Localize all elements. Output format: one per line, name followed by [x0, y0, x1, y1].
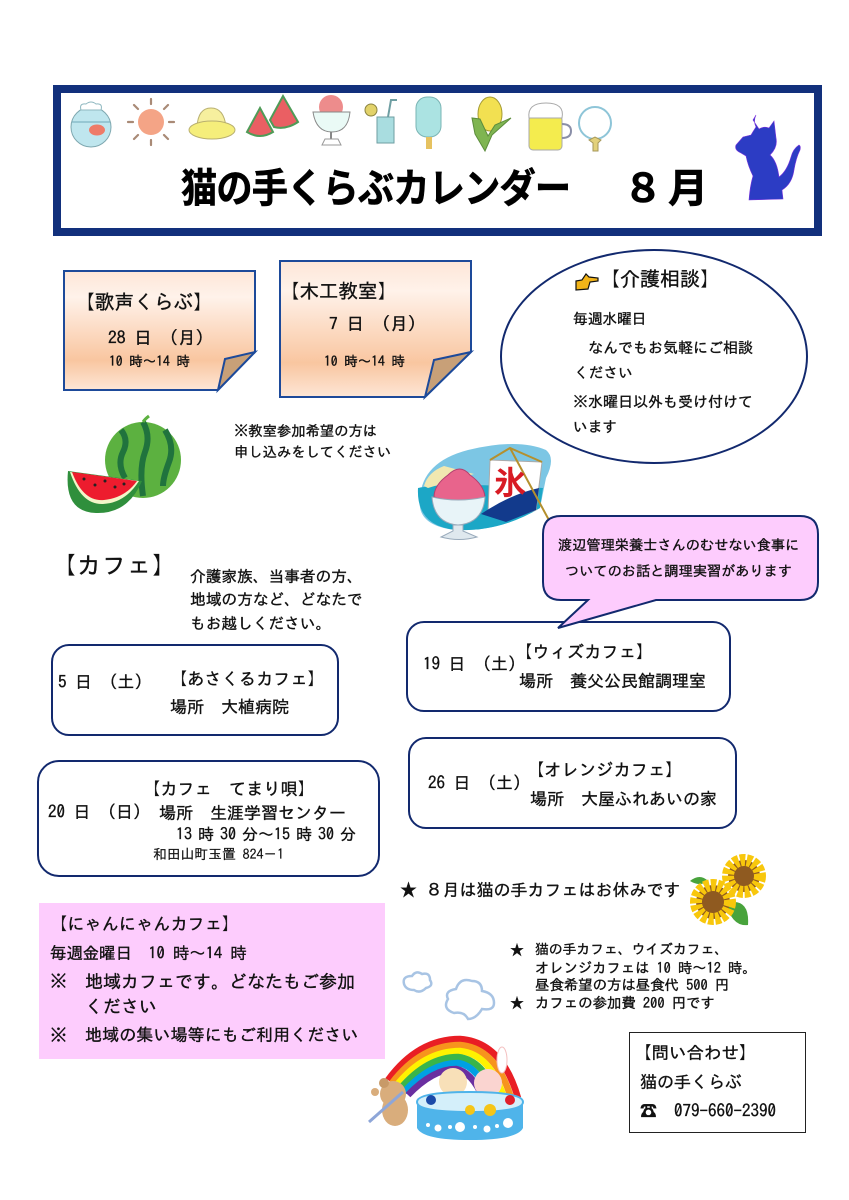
text: なんでもお気軽にご相談: [588, 340, 753, 355]
text: 毎週金曜日 10 時～14 時: [50, 945, 247, 961]
singing club date: 28 日 （月）: [108, 330, 213, 347]
text: 猫の手くらぶ: [640, 1074, 742, 1091]
panel: Temari-uta cafe: [37, 760, 380, 877]
text: ※水曜日以外も受け付けて: [573, 394, 753, 409]
illustration: clouds: [402, 971, 496, 1020]
text: 5 日 （土）: [58, 674, 152, 691]
text: もお越しください。: [190, 615, 331, 631]
text: 【問い合わせ】: [634, 1045, 756, 1062]
panel: Nyan-nyan cafe: [39, 903, 385, 1059]
cafe info notes: [510, 942, 757, 1010]
text: 19 日 （土）: [423, 656, 525, 673]
header panel: [53, 85, 822, 236]
illustration: shaved ice with flag: [418, 444, 551, 540]
text: ☎ 079-660-2390: [640, 1103, 776, 1120]
panel: contact: [629, 1032, 806, 1133]
text: 【カフェ てまり唄】: [143, 781, 315, 798]
icon: watermelon slices: [247, 96, 298, 136]
header month: ８月: [623, 156, 713, 214]
singing club heading: 【歌声くらぶ】: [75, 293, 213, 312]
icon: beer mug: [529, 103, 571, 150]
panel: Wiz cafe: [406, 621, 731, 712]
Wiz cafe text: [423, 643, 706, 690]
summer icon row: [70, 94, 801, 200]
text: 昼食希望の方は昼食代 500 円: [535, 977, 729, 992]
icon: straw hat: [189, 108, 235, 139]
icon: sun: [128, 99, 174, 145]
singing club time: 10 時～14 時: [109, 354, 190, 368]
panel: Asakuru cafe: [51, 644, 339, 736]
text: 場所 生涯学習センター: [159, 805, 346, 822]
consultation heading: 【介護相談】: [600, 269, 720, 289]
panel: woodworking note: [279, 260, 474, 400]
text: ※: [50, 1027, 67, 1044]
icon: goldfish bowl: [71, 102, 111, 147]
illustration: rainbow pool with animals: [368, 1036, 524, 1140]
text: 26 日 （土）: [428, 775, 530, 792]
contact text: [634, 1044, 776, 1120]
icon: pointing hand: [575, 273, 599, 291]
illustration: sunflowers: [690, 854, 766, 926]
Temari-uta cafe text: [48, 780, 356, 861]
cafe heading: 【カフェ】: [52, 553, 177, 577]
callout text: [558, 538, 799, 578]
text: 【にゃんにゃんカフェ】: [50, 916, 239, 933]
icon: shaved ice: [313, 95, 350, 145]
icon: blue cat: [736, 115, 800, 200]
text: 猫の手カフェ、ウイズカフェ、: [535, 942, 728, 956]
icon: corn: [472, 97, 511, 151]
text: カフェの参加費 200 円です: [535, 995, 715, 1010]
text: ください: [574, 365, 633, 380]
text: 【あさくるカフェ】: [170, 671, 325, 688]
text: オレンジカフェは 10 時～12 時。: [535, 960, 757, 975]
text: ください: [85, 998, 157, 1016]
text: 20 日 （日）: [48, 804, 150, 821]
text: 13 時 30 分～15 時 30 分: [176, 826, 356, 842]
text: ※: [50, 973, 67, 990]
text: 【ウィズカフェ】: [515, 644, 653, 661]
text: 毎週水曜日: [573, 311, 646, 326]
consultation text: [573, 311, 753, 434]
text: ★: [510, 996, 524, 1010]
text: 場所 大屋ふれあいの家: [530, 791, 717, 808]
illustration: shaved ice with flag: 氷: [494, 458, 526, 504]
text: 介護家族、当事者の方、: [190, 568, 363, 584]
text: ※教室参加希望の方は: [234, 423, 377, 438]
woodworking time: 10 時～14 時: [324, 354, 405, 368]
text: 申し込みをしてください: [234, 444, 391, 459]
text: ついてのお話と調理実習があります: [565, 564, 792, 578]
Nyan-nyan cafe text: [50, 915, 358, 1044]
callout: nutritionist talk: [542, 515, 819, 629]
icon: paper fan: [579, 107, 611, 151]
text: 地域カフェです。どなたもご参加: [85, 973, 355, 991]
Asakuru cafe text: [58, 670, 325, 716]
panel: Orange cafe: [408, 737, 737, 829]
header title: 猫の手くらぶカレンダー: [181, 156, 570, 214]
text: 和田山町玉置 824－1: [153, 847, 284, 861]
August closure notice: ★ ８月は猫の手カフェはお休みです: [400, 882, 680, 899]
text: 渡辺管理栄養士さんのむせない食事に: [558, 538, 799, 552]
text: 地域の集い場等にもご利用ください: [85, 1027, 358, 1044]
text: 場所 大植病院: [170, 699, 289, 716]
illustration: watermelon: [68, 414, 181, 513]
text: ★: [510, 943, 524, 957]
Orange cafe text: [428, 761, 717, 808]
icon: ice pop: [416, 97, 441, 149]
woodworking heading: 【木工教室】: [280, 282, 397, 301]
cafe intro text: [190, 568, 363, 631]
text: 地域の方など、どなたで: [190, 591, 363, 607]
classroom note: [234, 423, 391, 459]
icon: iced drink: [365, 100, 397, 143]
panel: singing club note: [63, 270, 258, 394]
woodworking date: 7 日 （月）: [329, 316, 425, 333]
text: 場所 養父公民館調理室: [519, 673, 706, 690]
panel: care consultation ellipse: [500, 249, 808, 464]
text: 【オレンジカフェ】: [527, 762, 683, 779]
text: います: [573, 419, 617, 434]
